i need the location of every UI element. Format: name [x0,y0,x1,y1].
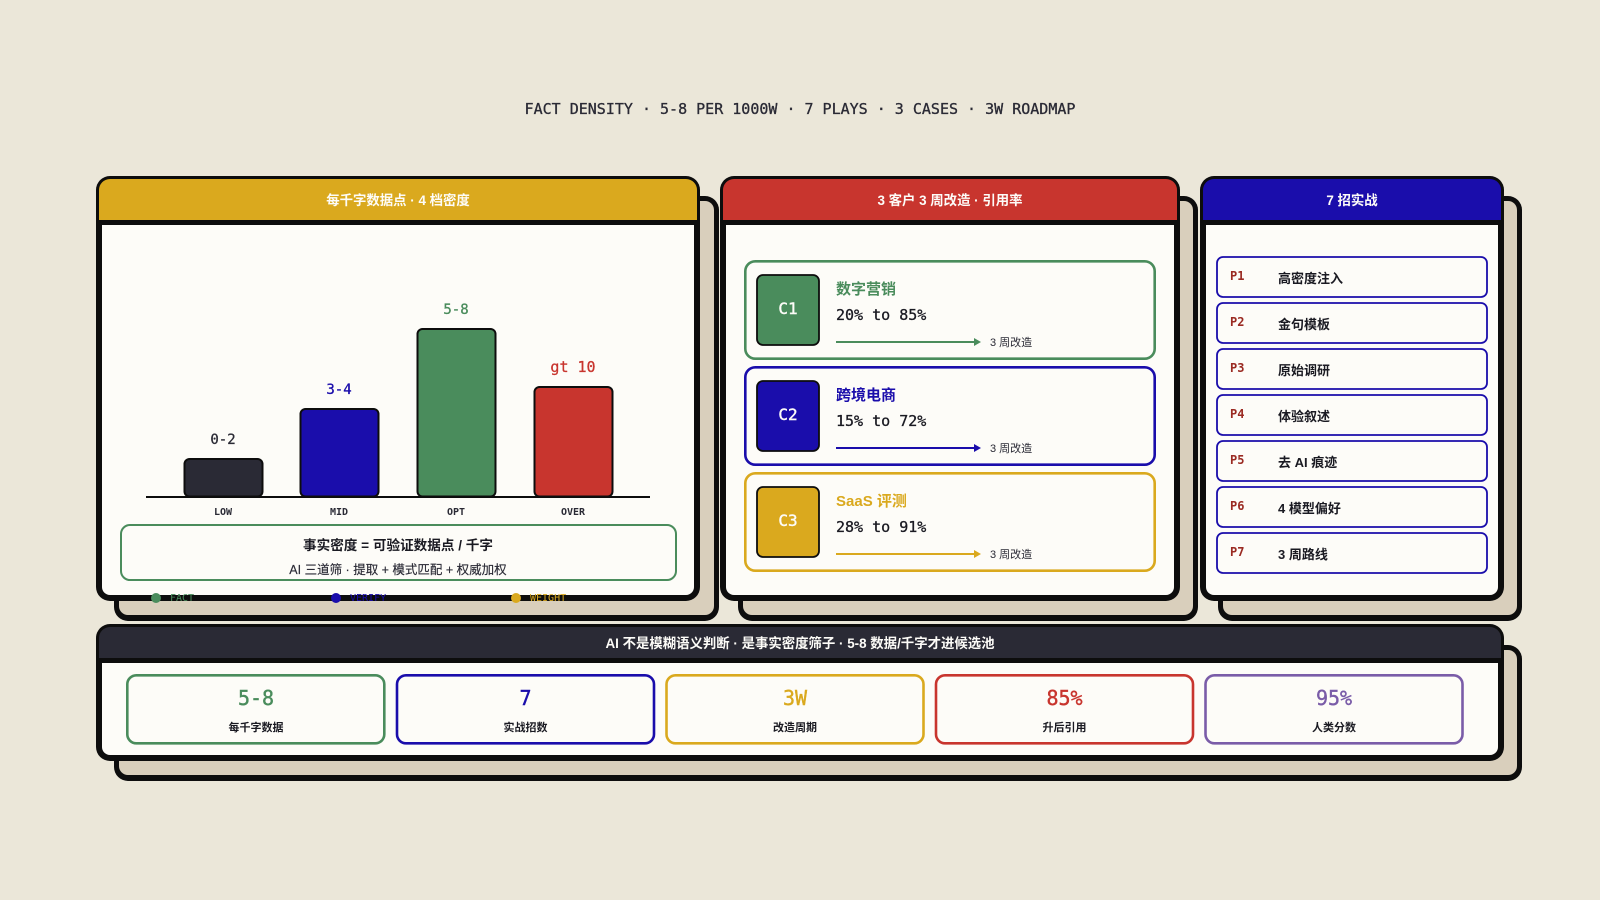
play P7 [1217,533,1487,573]
play P3: 原始调研 [1278,363,1330,378]
play P4 [1217,395,1487,435]
case card C3: SaaS 评测 [836,493,907,510]
play P1: 高密度注入 [1278,271,1343,286]
play P7: 3 周路线 [1278,547,1328,562]
bar chart: 3-4 [326,382,352,398]
case card C2 [745,367,1155,465]
play P2: 金句模板 [1278,317,1330,332]
case card C3: 3 周改造 [990,547,1032,561]
stat card: 7: 实战招数 [504,720,548,734]
play P5: 去 AI 痕迹 [1278,455,1337,470]
stat card: 95%: 95% [1316,686,1352,710]
play P3: P3 [1230,361,1244,375]
case card C3 [745,473,1155,571]
stat card: 95%: 人类分数 [1312,720,1356,734]
play P7: P7 [1230,545,1244,559]
play P6: 4 模型偏好 [1278,501,1341,516]
legend: WEIGHT [530,593,566,604]
case card C1 [745,261,1155,359]
case card C1: 20% to 85% [836,306,926,324]
play P1 [1217,257,1487,297]
case card C1: 3 周改造 [990,335,1032,349]
stat card: 3W: 3W [783,686,808,710]
play P3 [1217,349,1487,389]
stat card: 3W: 改造周期 [773,720,817,734]
callout: formula: 事实密度 = 可验证数据点 / 千字 [303,537,493,553]
bar chart: 5-8 [443,302,469,318]
stat card: 85%: 升后引用 [1042,720,1086,734]
stat card: 85%: 85% [1046,686,1083,710]
stat card: 5-8 [127,675,384,743]
panel: cases [720,176,1198,621]
play P2 [1217,303,1487,343]
bar chart: LOW [214,507,233,518]
stat card: 5-8: 每千字数据 [228,720,284,734]
play P4: P4 [1230,407,1244,421]
case card C1: 数字营销 [836,280,896,298]
legend: FACT [170,593,194,604]
bar chart [146,302,650,518]
panel: summary stats [96,624,1522,781]
panel header: plays [1203,179,1501,220]
case card C2: 3 周改造 [990,441,1032,455]
play P5: P5 [1230,453,1244,467]
panel header: density: 每千字数据点 · 4 档密度 [326,192,470,208]
case card C2: 15% to 72% [836,412,926,430]
stat card: 3W [666,675,924,743]
play P1: P1 [1230,269,1244,283]
case card C1: C1 [778,299,798,318]
stat card: 7 [397,675,654,743]
case card C2: 跨境电商 [836,386,896,404]
play P4: 体验叙述 [1278,409,1330,424]
stat card: 5-8: 5-8 [238,686,274,710]
title: FACT DENSITY · 5-8 PER 1000W · 7 PLAYS · 3 CASES · 3W ROADMAP [525,100,1075,118]
play P6: P6 [1230,499,1244,513]
bar chart: MID [330,507,348,518]
panel header: summary: AI 不是模糊语义判断 · 是事实密度筛子 · 5-8 数据/千字才进候选池 [605,635,995,651]
case card C2: C2 [778,405,798,424]
bar chart: 0-2 [210,432,236,448]
stat card: 7: 7 [519,686,532,710]
panel: density chart [96,176,719,621]
legend: VERIFY [350,593,386,604]
panel header: summary [99,627,1501,658]
bar chart: OPT [447,507,465,518]
panel header: cases: 3 客户 3 周改造 · 引用率 [877,192,1023,208]
legend [151,593,566,604]
case card C3: C3 [778,511,798,530]
bar chart: OVER [561,507,586,518]
panel header: density [99,179,697,220]
panel header: cases [723,179,1177,220]
callout: formula [121,525,676,580]
play P2: P2 [1230,315,1244,329]
play P5 [1217,441,1487,481]
panel header: plays: 7 招实战 [1326,192,1378,208]
play P6 [1217,487,1487,527]
stat card: 85% [936,675,1193,743]
callout: formula: AI 三道筛 · 提取 + 模式匹配 + 权威加权 [289,562,507,577]
panel: plays [1200,176,1522,621]
bar chart: gt 10 [550,358,596,376]
case card C3: 28% to 91% [836,518,926,536]
stat card: 95% [1206,675,1462,743]
